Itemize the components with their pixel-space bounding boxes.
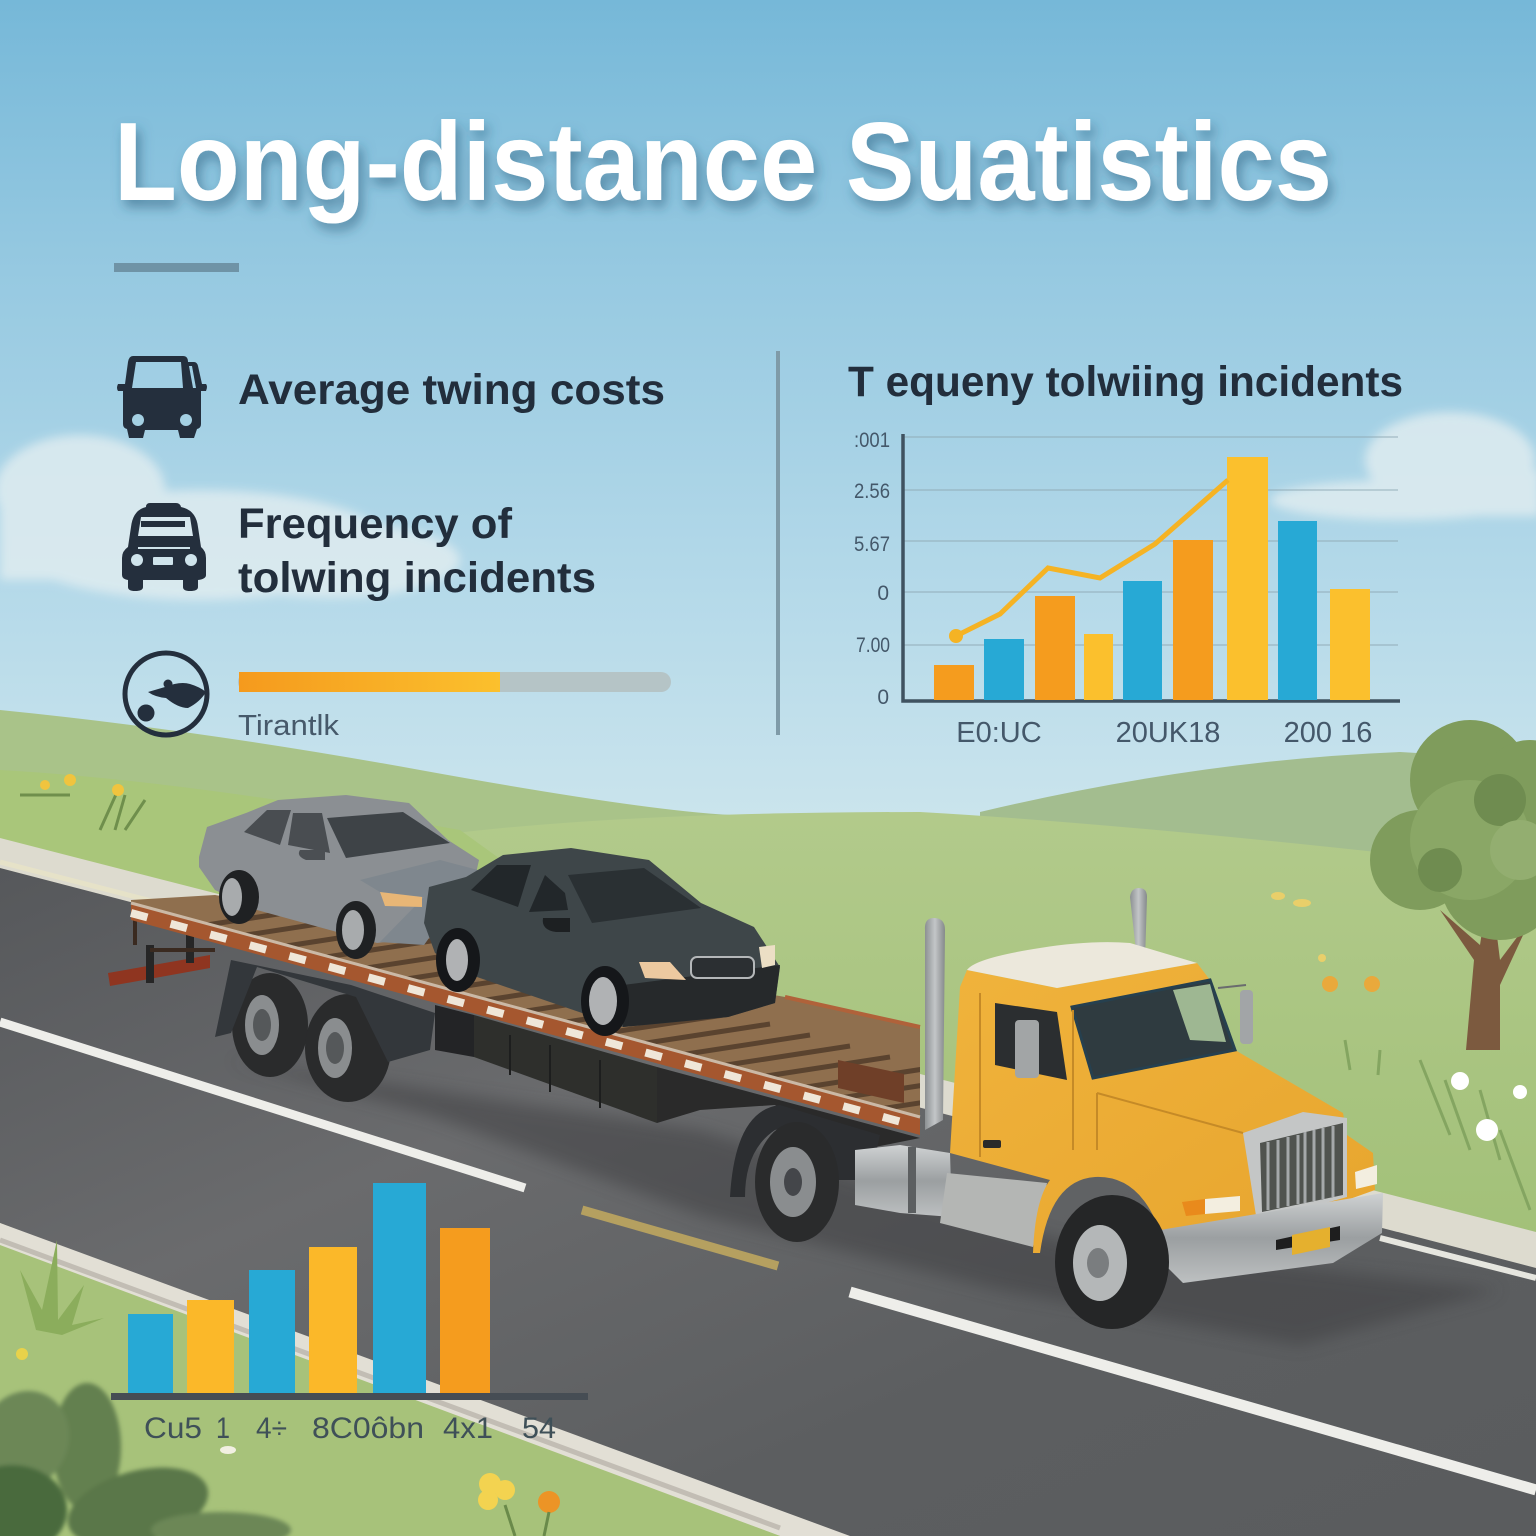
road shadow bbox=[230, 1060, 1500, 1345]
toolbox bbox=[838, 1060, 904, 1103]
flatbed bbox=[130, 895, 920, 1135]
rear fender bbox=[215, 960, 435, 1062]
grille bbox=[1243, 1112, 1347, 1222]
x axis labels: E0:UC bbox=[956, 717, 1042, 749]
y axis labels: 0 bbox=[877, 582, 889, 605]
panel: metrics bbox=[117, 356, 671, 742]
y axis labels bbox=[854, 429, 890, 709]
x labels: 54 bbox=[522, 1412, 556, 1445]
label: average towing costs: Average twing costs bbox=[238, 366, 665, 414]
label: frequency of towing incidents: tolwing incidents bbox=[238, 554, 596, 602]
icon: circle gauge bbox=[125, 653, 207, 735]
door lines bbox=[980, 993, 1243, 1157]
clouds bbox=[0, 412, 1536, 600]
bars bbox=[934, 457, 1370, 700]
door window bbox=[995, 1003, 1067, 1080]
bottom bar chart bbox=[111, 1183, 588, 1445]
icon: bus bbox=[117, 356, 207, 438]
panel: chart bbox=[848, 358, 1403, 749]
y axis labels: 0 bbox=[877, 686, 889, 709]
panel divider bbox=[776, 351, 780, 735]
background sky bbox=[0, 0, 1536, 900]
front wheel bbox=[1055, 1195, 1169, 1329]
x labels: 1 bbox=[216, 1412, 230, 1445]
bars bbox=[128, 1183, 490, 1393]
y axis labels: 7.00 bbox=[856, 634, 890, 657]
x labels: Cu5 bbox=[144, 1412, 202, 1445]
rear wheels bbox=[232, 973, 391, 1102]
grass tuft bbox=[20, 1240, 104, 1335]
baseline bbox=[111, 1393, 588, 1400]
tree bbox=[1370, 720, 1536, 1050]
y axis labels: 5.67 bbox=[854, 533, 890, 556]
distant hills bbox=[0, 710, 1536, 1300]
foliage bbox=[0, 1376, 291, 1536]
trend line bbox=[949, 480, 1228, 643]
x labels: 8C0ôbn bbox=[312, 1412, 424, 1445]
progress label: Tirantlk bbox=[238, 710, 340, 742]
road bbox=[0, 838, 1536, 1536]
foreground grass bbox=[0, 1223, 850, 1536]
rear hitch bbox=[108, 912, 215, 986]
ground base bbox=[0, 850, 1536, 1536]
roadside flowers bbox=[20, 774, 1530, 1210]
x axis labels: 200 16 bbox=[1284, 717, 1372, 749]
title: Long-distance Suatistics bbox=[114, 100, 1332, 224]
mirrors bbox=[1015, 1020, 1039, 1078]
chart axes bbox=[903, 434, 1400, 701]
windshield bbox=[1072, 980, 1235, 1078]
x labels: 4÷ bbox=[256, 1412, 287, 1445]
front trailer wheel bbox=[730, 1105, 880, 1242]
bumper bbox=[1160, 1193, 1383, 1283]
chart gridlines bbox=[904, 437, 1398, 645]
x labels bbox=[144, 1412, 556, 1445]
dark car bbox=[424, 848, 780, 1036]
x labels: 4x1 bbox=[443, 1412, 493, 1445]
label: frequency of towing incidents: Frequency of bbox=[238, 500, 513, 548]
exhaust stacks bbox=[925, 888, 1147, 1130]
progress bar bbox=[238, 672, 671, 692]
x axis labels bbox=[956, 717, 1372, 749]
x axis labels: 20UK18 bbox=[1116, 717, 1220, 749]
under-bed storage boxes bbox=[435, 1005, 920, 1150]
y axis labels: 2.56 bbox=[854, 480, 890, 503]
fuel tank and step bbox=[855, 1145, 1047, 1247]
y axis labels: :001 bbox=[854, 429, 890, 452]
flowers bbox=[16, 1348, 560, 1536]
silver car bbox=[199, 795, 479, 959]
tow truck bbox=[108, 795, 1500, 1345]
icon: car bbox=[122, 503, 206, 591]
chart heading: T equeny tolwiing incidents bbox=[848, 358, 1403, 406]
cab roof bbox=[967, 942, 1197, 988]
title underline bbox=[114, 263, 239, 272]
headlights bbox=[1182, 1165, 1377, 1216]
cab bbox=[950, 942, 1375, 1253]
